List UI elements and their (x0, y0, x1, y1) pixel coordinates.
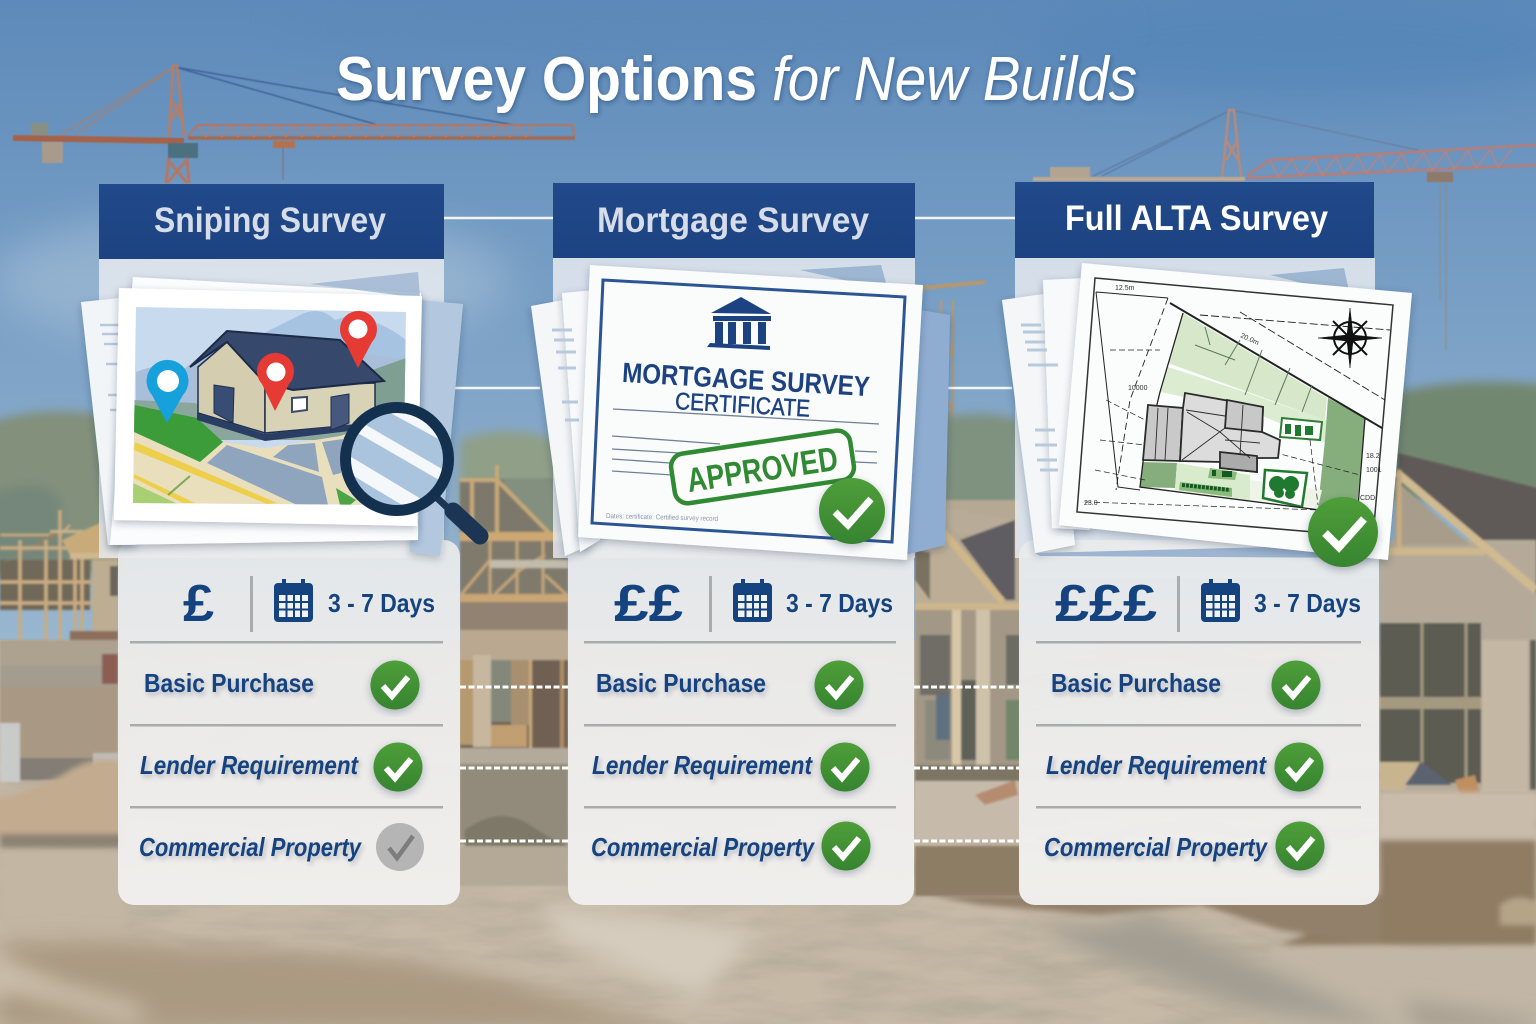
plot: green zones (1140, 313, 1365, 507)
price and duration row: ££ (614, 575, 683, 633)
row: Lender Requirement: Lender Requirement (592, 750, 813, 780)
price and duration row: 3 - 7 Days (328, 588, 435, 618)
row: Basic Purchase (1036, 641, 1361, 710)
illustration: certificate (531, 265, 950, 560)
lower card body (568, 540, 914, 905)
illustration: site plan (1002, 263, 1412, 567)
price and duration row: £££ (1055, 575, 1157, 633)
background: left buildings and rubble (0, 510, 118, 782)
house (190, 331, 384, 441)
row: Basic Purchase (584, 641, 896, 710)
title: for New Builds (772, 45, 1137, 114)
row: Commercial Property (1036, 806, 1361, 870)
price and duration row: 3 - 7 Days (1254, 588, 1361, 618)
pin: red centre (257, 353, 294, 411)
plan labels: 23.0 (1084, 500, 1098, 507)
icon: calendar (1201, 579, 1240, 622)
illustration: map with house and pins (81, 272, 480, 556)
row: Lender Requirement (1036, 724, 1361, 792)
certificate text: CERTIFICATE (674, 388, 811, 423)
panel: Mortgage Survey (531, 183, 950, 905)
header band: Mortgage Survey (597, 201, 870, 240)
lower card body (1019, 540, 1379, 905)
background: left dirt pile (0, 760, 125, 935)
plan labels: 12.5m (1115, 285, 1135, 292)
pin: red right (340, 311, 377, 368)
row: Lender Requirement: Lender Requirement (140, 750, 359, 780)
price and duration row (183, 575, 435, 633)
title: Survey Options (336, 45, 757, 114)
header band: Sniping Survey (154, 201, 386, 240)
plot: building footprint (1143, 393, 1280, 472)
upper translucent panel (553, 258, 915, 558)
row: Lender Requirement (584, 724, 896, 792)
row: Commercial Property: Commercial Property (591, 832, 815, 862)
icon: calendar (733, 579, 772, 622)
background: far crane mast (922, 282, 985, 505)
row: Commercial Property: Commercial Property (1044, 832, 1268, 862)
row: Basic Purchase (130, 641, 443, 710)
price and duration row: 3 - 7 Days (786, 588, 893, 618)
panel: Sniping Survey (81, 184, 480, 905)
connector lines (444, 218, 1020, 841)
illustration: certificate: Dates: certificate: Certified survey record (606, 513, 718, 523)
price and duration row (1055, 575, 1361, 633)
row: Lender Requirement: Lender Requirement (1046, 750, 1267, 780)
icon: calendar (274, 579, 313, 622)
background: ground (0, 640, 1536, 1024)
title (336, 45, 1137, 114)
plan labels: 20.0m (1239, 332, 1260, 347)
plan labels: CDD (1360, 495, 1375, 502)
background: left crane (13, 66, 575, 183)
background: right rubble and soil (930, 792, 1536, 1024)
badge: green check (1308, 497, 1378, 567)
plan labels: 18.2 (1366, 453, 1380, 460)
row: Commercial Property (584, 806, 896, 870)
icon: compass rose (1318, 308, 1382, 368)
background: centre-right timber house (915, 500, 1020, 896)
certificate text: MORTGAGE SURVEY (621, 357, 871, 402)
upper translucent panel (99, 258, 444, 558)
row: Lender Requirement (130, 724, 443, 792)
header band (1015, 182, 1374, 258)
header band: Full ALTA Survey (1065, 199, 1328, 238)
price and duration row: £ (183, 575, 214, 633)
background: right house (1380, 453, 1536, 795)
pin: blue (146, 360, 188, 423)
certificate text (620, 357, 871, 426)
plan labels (1084, 285, 1382, 507)
background: centre-left timber building (460, 465, 568, 886)
row: Basic Purchase: Basic Purchase (144, 668, 314, 698)
plot: boundary lines (1085, 292, 1390, 510)
header band (553, 183, 915, 258)
plan labels: 10000 (1128, 385, 1148, 392)
map: roads and plots (133, 405, 363, 505)
icon: bank building (707, 297, 771, 350)
row: Basic Purchase: Basic Purchase (1051, 668, 1221, 698)
lower card body (118, 540, 460, 905)
background: right crane (1033, 110, 1536, 350)
row: Commercial Property (130, 806, 443, 871)
approved stamp: APPROVED (684, 440, 840, 500)
price and duration row (614, 575, 893, 633)
upper translucent panel (1015, 258, 1375, 558)
row: Commercial Property: Commercial Property (139, 832, 362, 862)
header band (99, 184, 444, 259)
panel: Full ALTA Survey (1002, 182, 1412, 905)
row: Basic Purchase: Basic Purchase (596, 668, 766, 698)
magnifying glass (345, 405, 480, 536)
plan labels: 1001 (1366, 467, 1382, 474)
badge: green check (819, 478, 885, 544)
background: tree line (0, 382, 1536, 575)
background: foreground dirt bands (0, 905, 1536, 1024)
